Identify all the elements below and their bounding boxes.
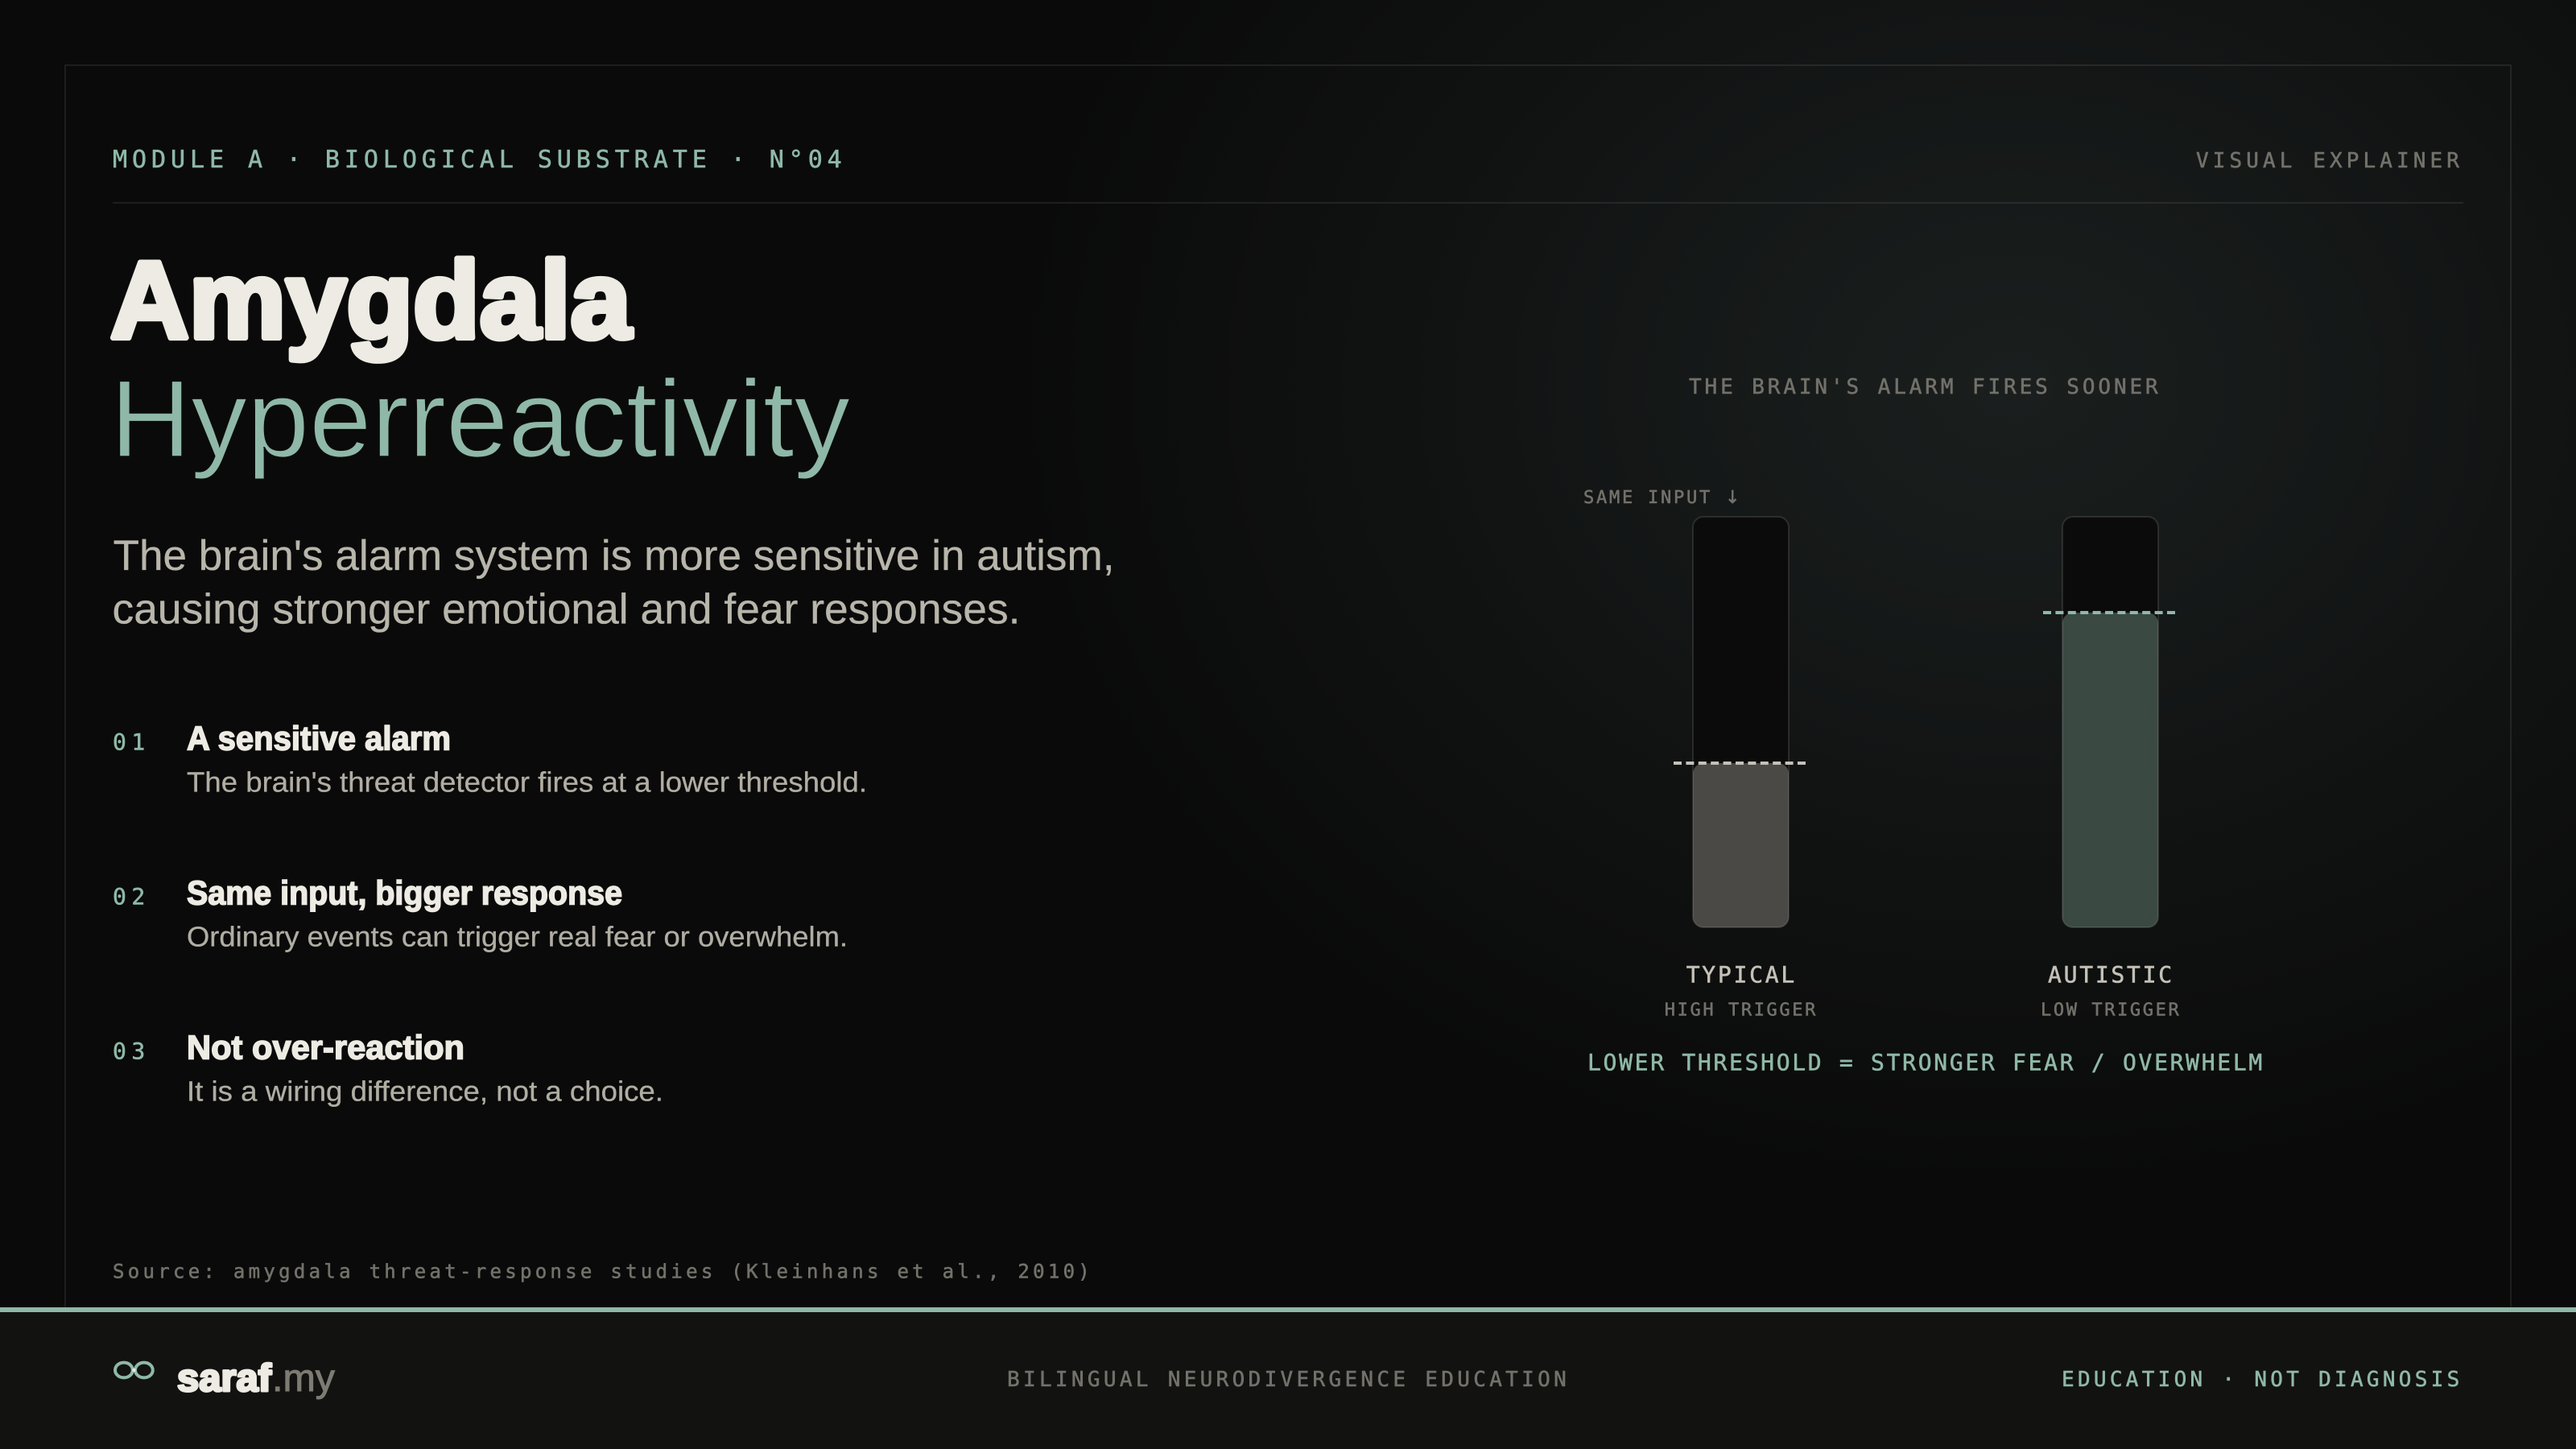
point 03: 03 (113, 1038, 151, 1065)
subtitle text block: causing stronger emotional and fear responses. (113, 586, 1021, 633)
chart heading: THE BRAIN'S ALARM FIRES SOONER (1689, 375, 2161, 399)
subtitle text block: The brain's alarm system is more sensitive in autism, (113, 532, 1115, 580)
header row (113, 146, 2463, 204)
point 02: Ordinary events can trigger real fear or overwhelm. (187, 921, 848, 952)
brand wordmark (177, 1357, 335, 1400)
title line: Hyperreactivity: Hyperreactivity (110, 357, 850, 480)
point 02: Same input, bigger response (187, 874, 622, 912)
point 01: The brain's threat detector fires at a lower threshold. (187, 766, 867, 798)
title line: Amygdala: Amygdala (110, 239, 632, 361)
subtitle text block (113, 532, 1115, 633)
point 01: A sensitive alarm (187, 720, 451, 758)
point 01: 01 (113, 729, 151, 756)
point 03: It is a wiring difference, not a choice. (187, 1075, 663, 1107)
label: autistic (2041, 962, 2181, 1021)
icon: infinity logo (115, 1363, 153, 1377)
label: typical: TYPICAL (1686, 962, 1797, 989)
label: autistic: LOW TRIGGER (2041, 1000, 2181, 1021)
point 02 (113, 874, 848, 952)
brand wordmark: .my (272, 1357, 335, 1400)
point 03 (113, 1029, 663, 1107)
title (110, 239, 850, 480)
label: typical: HIGH TRIGGER (1665, 1000, 1818, 1021)
footer bar (0, 1307, 2576, 1449)
chart takeaway: LOWER THRESHOLD = STRONGER FEAR / OVERWHELM (1587, 1049, 2264, 1075)
chart: threshold comparison (1583, 375, 2264, 1075)
label: typical (1665, 962, 1818, 1021)
bar: typical (1674, 517, 1806, 927)
label: autistic: AUTISTIC (2048, 962, 2174, 989)
brand wordmark: saraf (177, 1357, 272, 1400)
source citation: Source: amygdala threat-response studies (Kleinhans et al., 2010) (113, 1261, 1093, 1283)
tag: visual explainer: VISUAL EXPLAINER (2196, 149, 2463, 173)
bar: autistic (2043, 517, 2175, 927)
point 03: Not over-reaction (187, 1029, 464, 1067)
eyebrow: module label: MODULE A · BIOLOGICAL SUBSTRATE · N°04 (113, 146, 847, 174)
footer right text: EDUCATION · NOT DIAGNOSIS (2062, 1368, 2463, 1392)
label: same input: SAME INPUT ↓ (1583, 488, 1742, 508)
point 02: 02 (113, 884, 151, 910)
point 01 (113, 720, 867, 798)
footer center text: BILINGUAL NEURODIVERGENCE EDUCATION (1007, 1368, 1570, 1392)
list: key points (113, 720, 867, 1107)
